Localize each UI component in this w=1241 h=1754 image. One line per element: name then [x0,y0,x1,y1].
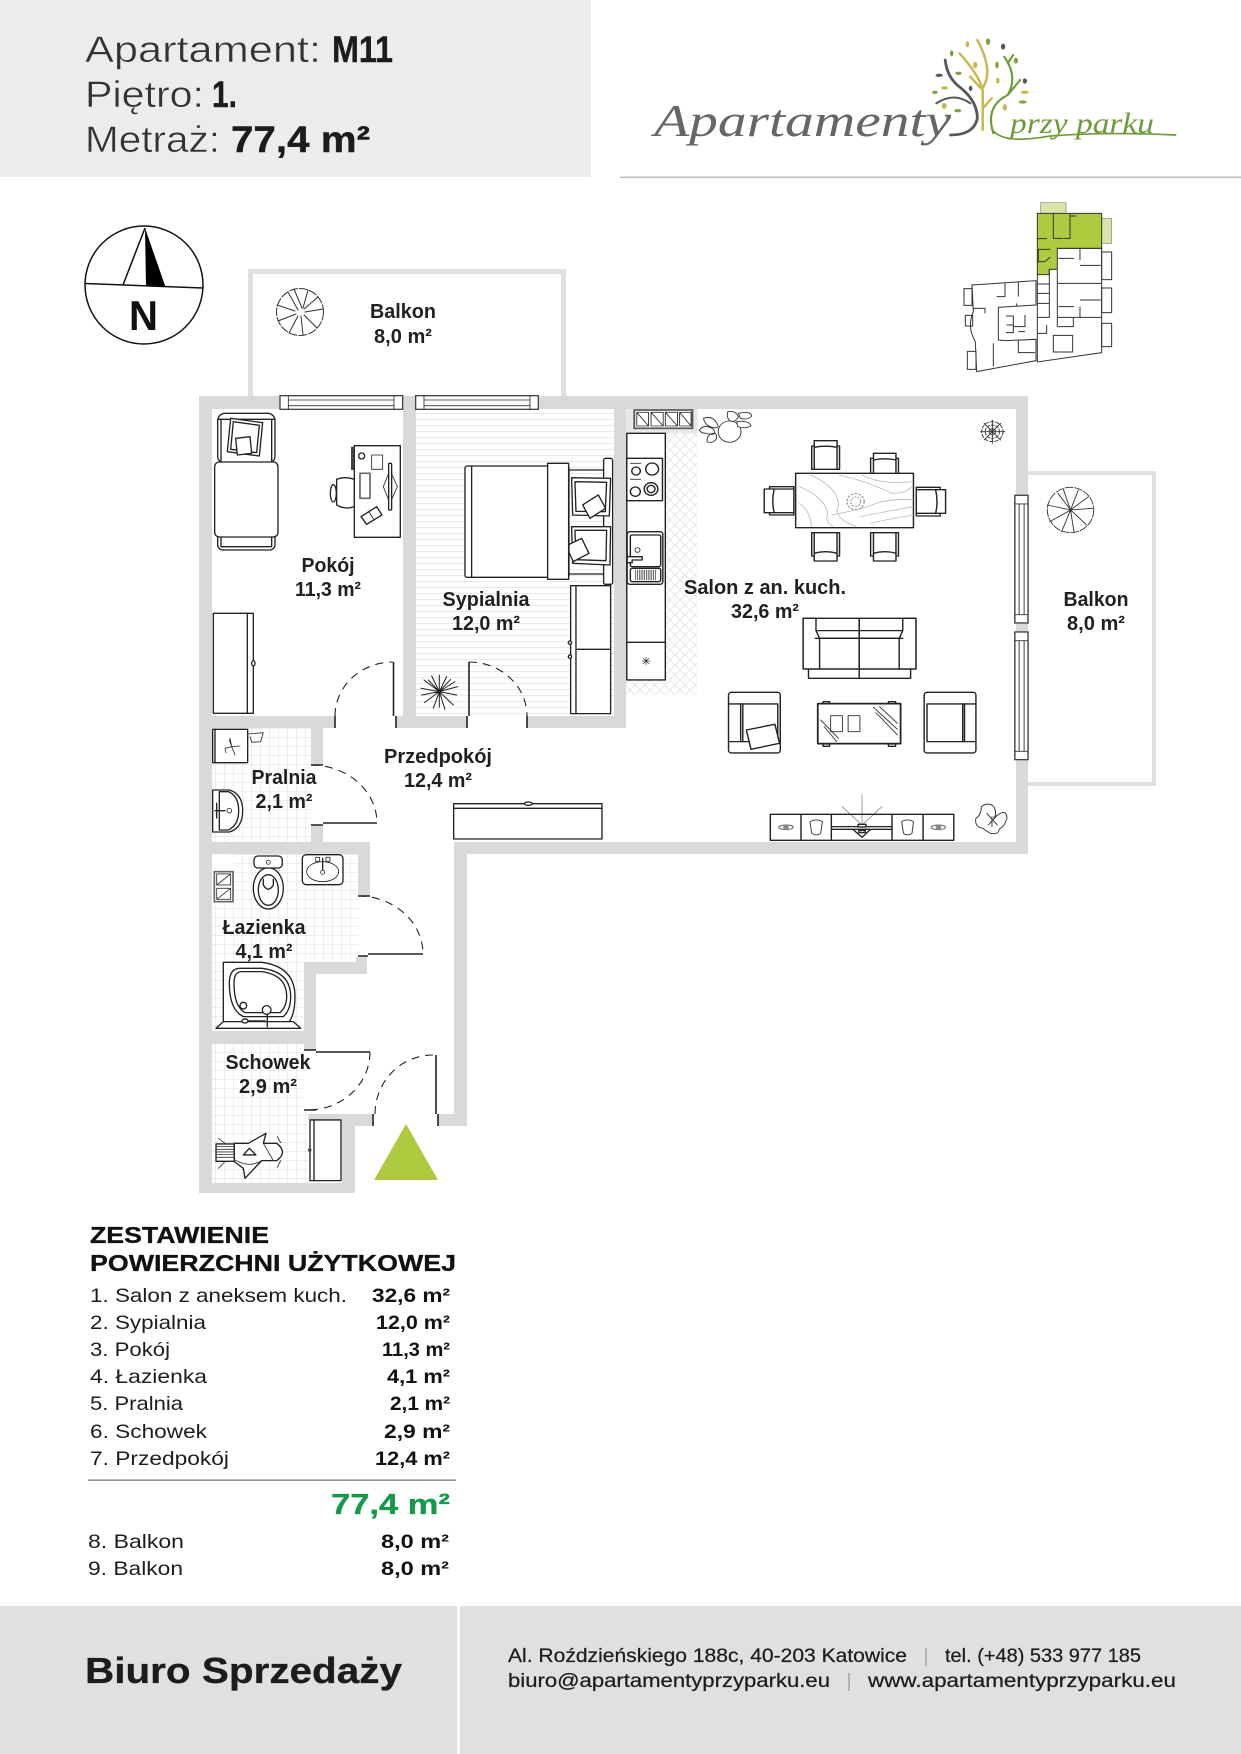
floor: bedroom stripes [416,409,614,716]
door: bathroom [358,896,423,956]
coffee table [818,702,901,746]
area [85,119,370,160]
logo: Apartamenty przy parku: Apartamenty [650,95,952,146]
range hood niche [626,409,697,433]
footer panel: contact details: Al. Roździeńskiego 188c, 40-203 Katowice [508,1645,907,1667]
bedroom wardrobe [568,586,611,714]
walls [199,396,1028,1193]
room label: Przedpokój: Przedpokój [384,746,492,768]
room area rows: 3. Pokój [90,1339,170,1361]
storage cabinet [308,1120,341,1181]
balcony rows: 8. Balkon [88,1531,184,1553]
room area rows: 11,3 m² [382,1339,451,1361]
footer panel: contact details [460,1606,1241,1754]
double bed [465,458,613,584]
location key plan [964,203,1112,372]
room label: Pralnia: 2,1 m² [256,791,313,813]
room label: Przedpokój [384,746,492,792]
floor: bathroom tiles [212,854,358,1031]
door: bedroom [467,662,527,728]
room label: Przedpokój: 12,4 m² [404,770,472,792]
balcony rows [88,1531,450,1580]
floor: 1. [212,74,237,115]
left armchair [729,692,780,753]
dining table [796,473,913,528]
apartment number: Apartament: [85,29,321,70]
furniture: room and bedroom [213,413,613,714]
logo: Apartamenty przy parku [650,38,1176,146]
room area rows: 4. Łazienka [90,1366,207,1388]
room label: Pralnia: Pralnia [252,767,317,789]
door: storage [304,1050,370,1110]
room area rows: 1. Salon z aneksem kuch. [90,1285,347,1307]
floor finishes [212,409,697,1183]
window north 2 [416,396,538,409]
room area rows [90,1285,451,1470]
ventilation shaft [212,855,234,905]
shower tray [216,962,301,1028]
total area: 77,4 m² [331,1489,450,1521]
entrance marker triangle [374,1124,438,1180]
balcony tree north [276,288,324,336]
icon: north compass [85,226,203,344]
door: entrance [373,1055,438,1126]
footer panel: contact details: www.apartamentyprzyparku.eu [867,1670,1176,1692]
room label: Balkon east: 8,0 m² [1067,613,1125,635]
apartment number: M11 [332,29,393,70]
area: 77,4 m² [231,119,370,160]
room label: Łazienka [222,917,306,963]
toilet [253,856,283,909]
summary table [88,1222,456,1580]
kitchen counter [627,433,665,680]
room area rows: 2. Sypialnia [90,1312,206,1334]
area: Metraż: [85,119,220,160]
plant [421,675,458,709]
furniture: kitchen and living room [626,409,1094,840]
floor: kitchen diamonds [626,433,697,695]
balcony rows: 8,0 m² [381,1558,450,1580]
balcony outline east [1028,473,1154,784]
balcony tree east [1047,487,1094,533]
summary heading [90,1222,456,1276]
window north 1 [280,396,403,409]
room area rows: 32,6 m² [372,1285,451,1307]
icon: tree [932,38,1176,139]
room label: Balkon east [1064,589,1128,635]
laundry washbasin [213,790,243,832]
room label: Schowek: Schowek [226,1052,311,1074]
room label: Salon [684,577,846,623]
room label: Salon: 32,6 m² [731,601,799,623]
desk with chair [330,446,400,537]
room label: Balkon north: Balkon [370,301,436,323]
room area rows: 12,0 m² [376,1312,451,1334]
footer panel: sales office [0,1606,457,1754]
door: laundry [311,765,377,825]
room area rows: 12,4 m² [375,1448,451,1470]
summary heading: ZESTAWIENIE [90,1222,269,1248]
window east 1 [1015,495,1028,623]
room label: Pokój [295,555,361,601]
room label: Łazienka: Łazienka [222,917,306,939]
room area rows: 5. Pralnia [90,1393,183,1415]
hall cabinet [454,802,602,839]
header rule [620,176,1241,178]
footer panel: contact details: biuro@apartamentyprzyparku.eu [508,1670,830,1692]
header panel: apartment data [0,0,591,177]
footer panel: contact details: tel. (+48) 533 977 185 [945,1645,1141,1667]
media console [770,795,954,840]
room label: Balkon north: 8,0 m² [374,326,432,348]
room label: Schowek [226,1052,311,1098]
room label: Sypialnia [442,589,530,635]
apartment number [85,29,393,70]
logo: Apartamenty przy parku: przy parku [1008,107,1154,140]
room label: Schowek: 2,9 m² [239,1076,297,1098]
bathroom washbasin [302,855,343,885]
highlighted apartment [1037,203,1112,275]
room area rows: 7. Przedpokój [90,1448,229,1470]
windows [280,396,1028,760]
floor: Piętro: [85,74,204,115]
room area rows: 4,1 m² [387,1366,451,1388]
room label: Sypialnia: Sypialnia [442,589,530,611]
room label: Salon: Salon z an. kuch. [684,577,846,599]
single bed [215,413,278,550]
summary heading: POWIERZCHNI UŻYTKOWEJ [90,1250,456,1276]
vacuum cleaner [216,1133,282,1178]
icon: north compass: N [129,292,158,339]
room area rows: 2,1 m² [390,1393,451,1415]
room label: Balkon north [370,301,436,348]
room label: Balkon east: Balkon [1064,589,1128,611]
corner plant [976,804,1007,834]
potted plant [699,411,752,442]
washing machine [213,729,263,763]
room area rows: 6. Schowek [90,1421,207,1443]
room area rows: 2,9 m² [384,1421,451,1443]
room label: Sypialnia: 12,0 m² [452,613,520,635]
balcony rows: 9. Balkon [88,1558,183,1580]
summary rule [88,1480,456,1481]
room label: Łazienka: 4,1 m² [236,941,293,963]
dining chairs [764,441,946,561]
plant [981,420,1005,443]
window east 2 [1015,632,1028,760]
room label: Pokój: 11,3 m² [295,579,361,601]
wardrobe [213,613,255,713]
footer panel: sales office: Biuro Sprzedaży [85,1650,402,1691]
balcony outline north [250,272,564,396]
balcony rows: 8,0 m² [381,1531,450,1553]
right armchair [924,692,976,753]
room label: Pralnia [252,767,317,813]
room label: Pokój: Pokój [302,555,354,577]
doors [304,662,527,1126]
sofa [803,618,916,678]
floor: storage tiles [212,1044,308,1183]
furniture: wet rooms and hall [212,729,602,1181]
door: room [335,662,396,728]
floor: laundry tiles [212,728,311,842]
